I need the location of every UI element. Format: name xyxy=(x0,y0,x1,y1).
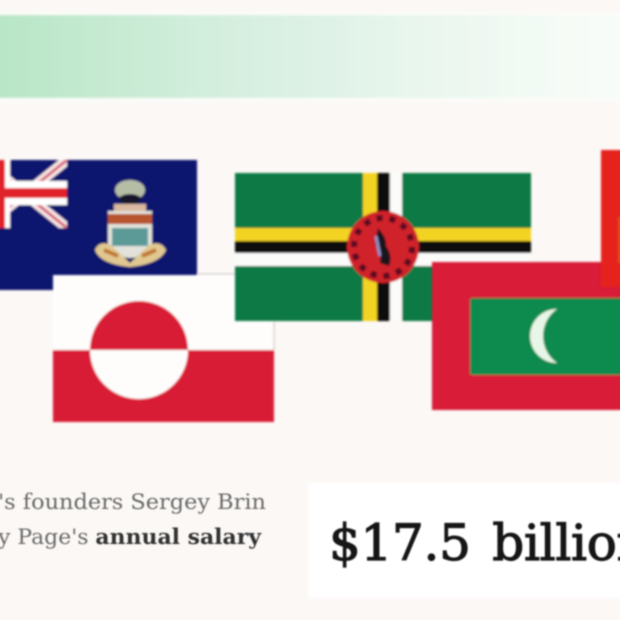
icon: crescent xyxy=(530,309,557,363)
cross stripes xyxy=(235,173,531,321)
icon: union jack canton xyxy=(0,158,70,230)
caption text: y Page's annual salary xyxy=(0,525,262,550)
flag: Cayman Islands xyxy=(0,150,197,290)
caption text: 's founders Sergey Brin xyxy=(0,490,266,515)
header band xyxy=(0,12,620,102)
flag: Dominica xyxy=(235,173,531,321)
flag: Maldives xyxy=(432,262,620,410)
icon: coat of arms xyxy=(95,180,166,267)
caption text xyxy=(0,490,266,550)
flag: partial red flag at right edge xyxy=(601,150,620,287)
icon: red disc with parrot xyxy=(347,211,419,283)
flag: Greenland xyxy=(53,274,274,422)
statistic panel xyxy=(308,483,620,598)
